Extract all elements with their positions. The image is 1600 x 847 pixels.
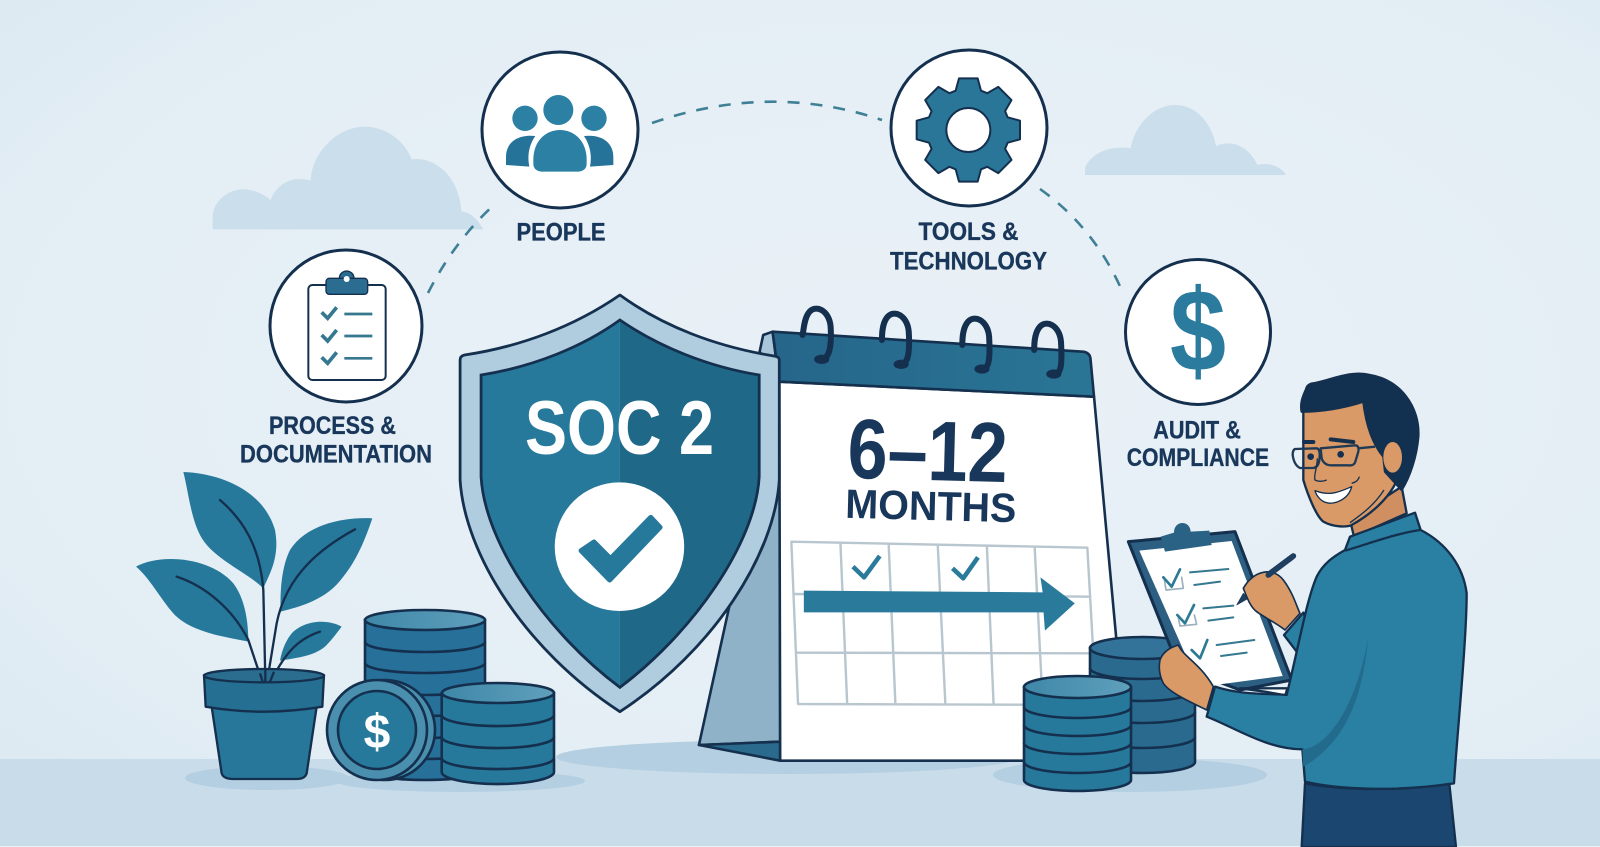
tools circle	[891, 50, 1047, 206]
people label: PEOPLE	[516, 218, 606, 246]
cloud right	[1085, 105, 1286, 175]
person smile	[1315, 487, 1352, 503]
person far sleeve	[1284, 613, 1313, 652]
timeline arrow	[804, 577, 1075, 631]
dashed connector: tools to audit	[1040, 189, 1123, 293]
clipboard board	[1128, 532, 1292, 690]
shield	[460, 295, 779, 712]
shield outer	[460, 295, 779, 712]
person lower hand	[1159, 645, 1213, 710]
calendar back flap	[760, 332, 779, 383]
clipboard clip	[1161, 523, 1212, 552]
audit label	[1127, 416, 1269, 472]
audit label: AUDIT &	[1153, 416, 1241, 444]
person shirt	[1207, 513, 1467, 789]
shirt shadow	[1302, 637, 1368, 767]
process label: DOCUMENTATION	[240, 441, 432, 469]
coin with dollar sign: $	[364, 706, 391, 759]
clipboard lower sheet	[1240, 688, 1287, 695]
coin with dollar sign	[327, 680, 435, 780]
tools label: TOOLS &	[918, 218, 1018, 246]
shield inner left	[481, 320, 620, 687]
shirt collar line	[1345, 530, 1420, 551]
coin stack: short left	[442, 683, 554, 784]
dashed connector: people to tools	[652, 102, 882, 123]
icon: gear	[917, 78, 1020, 182]
people circle	[482, 52, 638, 208]
tools label: TECHNOLOGY	[890, 247, 1047, 275]
dashed connector: process to people	[428, 204, 495, 293]
coin stack: back right	[1090, 637, 1195, 773]
shield badge check	[581, 517, 660, 580]
calendar months label: MONTHS	[845, 481, 1017, 531]
cloud left	[213, 127, 483, 229]
person upper hand	[1243, 572, 1300, 630]
person eyes	[1307, 451, 1344, 460]
calendar header	[773, 332, 1094, 397]
person holding clipboard	[1128, 374, 1467, 847]
calendar ring ends	[814, 355, 1061, 379]
person hair	[1301, 374, 1418, 490]
clipboard checklist	[1163, 569, 1254, 658]
shield badge circle	[555, 482, 684, 611]
calendar page	[779, 382, 1128, 761]
audit and compliance node	[1126, 260, 1270, 472]
shield inner outline	[481, 320, 759, 687]
person trousers	[1302, 783, 1456, 847]
ground shadows	[185, 740, 1267, 792]
person cheek and jaw lines	[1350, 477, 1384, 523]
person eyebrows	[1304, 439, 1353, 442]
person face	[1303, 397, 1400, 526]
audit circle	[1126, 260, 1270, 404]
calendar duration number: 6–12	[847, 402, 1009, 501]
icon: people group	[506, 95, 613, 172]
audit label: COMPLIANCE	[1127, 444, 1269, 472]
process and documentation node	[240, 250, 432, 469]
calendar stand	[699, 480, 780, 745]
calendar stand base	[699, 742, 780, 761]
floor	[0, 759, 1600, 847]
shield title: SOC 2	[525, 386, 714, 471]
pen	[1250, 556, 1293, 588]
pen over fingers	[1268, 557, 1292, 575]
process label	[240, 412, 432, 469]
person nose	[1315, 458, 1327, 481]
calendar checkmarks	[853, 556, 978, 578]
people node	[482, 52, 638, 246]
coin stack: tall left	[365, 610, 485, 780]
calendar grid	[791, 542, 1096, 705]
person glasses	[1293, 445, 1375, 468]
process circle	[270, 250, 422, 402]
icon: dollar sign: $	[1170, 265, 1226, 396]
person neck	[1350, 487, 1407, 537]
tools and technology node	[890, 50, 1047, 275]
calendar rings	[803, 309, 1061, 375]
plant in pot	[136, 472, 372, 779]
calendar	[699, 309, 1128, 761]
icon: clipboard checklist	[308, 271, 386, 380]
leaf veins and stems	[177, 500, 355, 680]
tools label	[890, 218, 1047, 275]
process label: PROCESS &	[269, 412, 396, 440]
person ear	[1383, 442, 1402, 473]
leaves	[136, 472, 372, 661]
pot	[212, 707, 317, 779]
clipboard paper	[1139, 541, 1283, 685]
shield inner right	[620, 320, 759, 687]
pen tip	[1237, 593, 1248, 605]
coin stack: front right	[1024, 676, 1131, 791]
